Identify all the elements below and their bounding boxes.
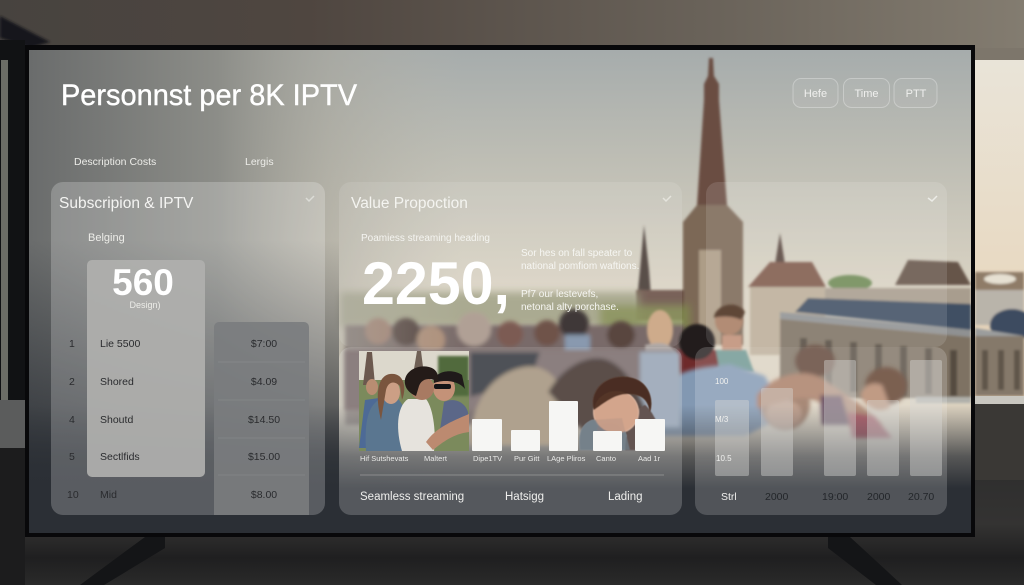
x-axis labels: 19:00 [822, 491, 848, 503]
highlight card: 560: 560 [112, 262, 174, 303]
title: Personnst per 8K IPTV [61, 79, 357, 112]
TV screen photo [29, 50, 971, 533]
bar chart [472, 401, 665, 451]
TV bezel [25, 45, 975, 537]
tab: Time [844, 78, 890, 108]
bar labels: Maltert [424, 454, 448, 463]
footer labels: Hatsigg [505, 491, 544, 503]
x-axis labels: 20.70 [908, 491, 934, 503]
label: Description Costs: Description Costs [74, 156, 156, 168]
row 5: Mid [100, 489, 117, 501]
row 1: 1 [69, 338, 75, 350]
x-axis labels [721, 491, 934, 503]
bar labels: Dipe1TV [473, 454, 502, 463]
row 5: 10 [67, 489, 79, 501]
background people right [650, 345, 907, 438]
foreground people behind panel [345, 350, 680, 450]
row 3: 4 [69, 414, 75, 426]
panel heading: Subscripion & IPTV [59, 195, 194, 212]
y-axis labels: 100 [715, 377, 729, 386]
x-axis labels: 2000 [867, 491, 891, 503]
row 1 [69, 338, 277, 350]
panel: right glass [706, 182, 947, 347]
tab: Hefe [793, 78, 838, 108]
row 4: Sectlfids [100, 451, 140, 463]
description text: Sor hes on fall speater to [521, 248, 633, 259]
row 1: $7:00 [251, 338, 277, 350]
row 2 [69, 376, 277, 388]
row 3: Shoutd [100, 414, 133, 426]
row 2: $4.09 [251, 376, 277, 388]
y-axis labels: 10.5 [716, 454, 732, 463]
description text: netonal alty porchase. [521, 302, 619, 313]
description text [521, 248, 639, 313]
footer labels: Seamless streaming [360, 491, 464, 503]
description text: national pomfiom waftions. [521, 261, 639, 272]
big number: 2250, [362, 250, 510, 317]
y-axis labels [715, 377, 732, 463]
y-axis labels: M/3 [715, 415, 729, 424]
row 5 [67, 489, 277, 501]
highlight card: 560: Design) [129, 300, 161, 310]
label: Lergis: Lergis [245, 156, 274, 168]
row 4 [69, 451, 280, 463]
x-axis labels: 2000 [765, 491, 789, 503]
bar labels: LAge Pliros [547, 454, 586, 463]
column labels [74, 156, 274, 168]
panel: bar chart over time [695, 347, 947, 515]
x-axis labels: Strl [721, 491, 737, 503]
photo: people hugging [359, 351, 469, 451]
table rows [67, 338, 280, 501]
row 3: $14.50 [248, 414, 280, 426]
highlight card: 560 [87, 260, 205, 477]
bar labels [360, 454, 661, 463]
row 4: 5 [69, 451, 75, 463]
bar labels: Aad 1r [638, 454, 661, 463]
tab: Hefe: Hefe [804, 88, 827, 100]
subheading: Belging [88, 232, 125, 244]
row 2: 2 [69, 376, 75, 388]
chevron [663, 196, 671, 201]
panel: seamless streaming [339, 347, 682, 515]
row 1: Lie 5500 [100, 338, 140, 350]
crowd [345, 309, 685, 425]
chevron [928, 196, 937, 201]
price column [214, 322, 309, 515]
child face clear overlay [580, 377, 651, 450]
panel heading: Value Propoction [351, 195, 468, 212]
left screen shade [29, 50, 430, 448]
bar labels: Hif Sutshevats [360, 454, 409, 463]
row 2: Shored [100, 376, 134, 388]
top-right tab buttons [793, 78, 937, 108]
bar labels: Canto [596, 454, 616, 463]
footer labels: Lading [608, 491, 643, 503]
panel: value proposition [339, 182, 682, 347]
row 5: $8.00 [251, 489, 277, 501]
footer labels [360, 475, 664, 503]
tab: PTT [894, 78, 937, 108]
row 3 [69, 414, 280, 426]
row 4: $15.00 [248, 451, 280, 463]
tab: PTT: PTT [906, 88, 927, 100]
description text: Pf7 our lestevefs, [521, 289, 598, 300]
TV stand legs [80, 537, 902, 585]
panel: subscription and IPTV [51, 182, 325, 515]
chart bars [715, 360, 942, 476]
cityscape [636, 58, 971, 403]
chevron [306, 196, 314, 201]
tab: Time: Time [854, 88, 879, 100]
bottom screen shade [29, 405, 971, 533]
subheading: Poamiess streaming heading [361, 233, 490, 244]
bar labels: Pur Gitt [514, 454, 540, 463]
lower-left shade [29, 254, 339, 480]
